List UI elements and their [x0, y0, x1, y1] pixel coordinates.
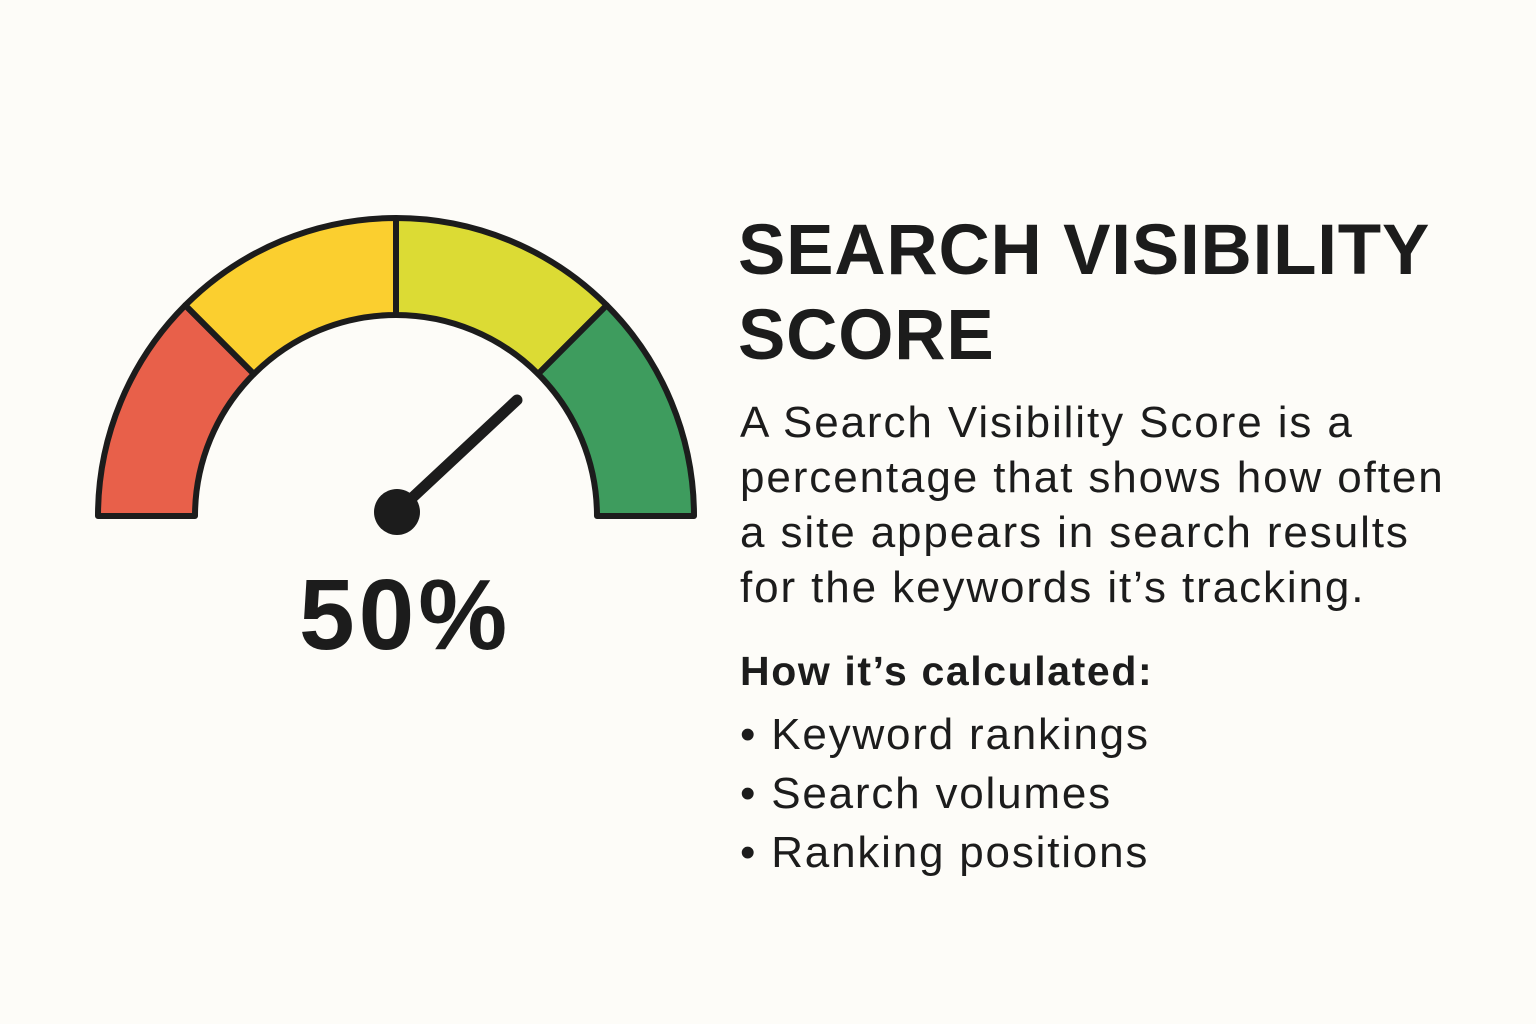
bullet list: • Search volumes [740, 769, 1112, 818]
gauge segment: red [98, 305, 254, 516]
bullet list: • Ranking positions [740, 828, 1149, 877]
bullet list [740, 710, 1150, 877]
score value: 50% [299, 559, 511, 671]
bullet list: • Keyword rankings [740, 710, 1150, 759]
subheading: How it’s calculated: [740, 648, 1153, 694]
description: percentage that shows how often [740, 453, 1445, 502]
gauge segment: lime [396, 218, 607, 374]
title: SCORE [738, 296, 994, 375]
title [738, 211, 1430, 375]
gauge [95, 215, 697, 535]
description: for the keywords it’s tracking. [740, 563, 1365, 612]
gauge segment: yellow [185, 218, 396, 374]
description: a site appears in search results [740, 508, 1410, 557]
description: A Search Visibility Score is a [740, 398, 1354, 447]
description [740, 398, 1445, 612]
title: SEARCH VISIBILITY [738, 211, 1430, 290]
gauge segment: green [538, 305, 694, 516]
needle [374, 400, 517, 535]
